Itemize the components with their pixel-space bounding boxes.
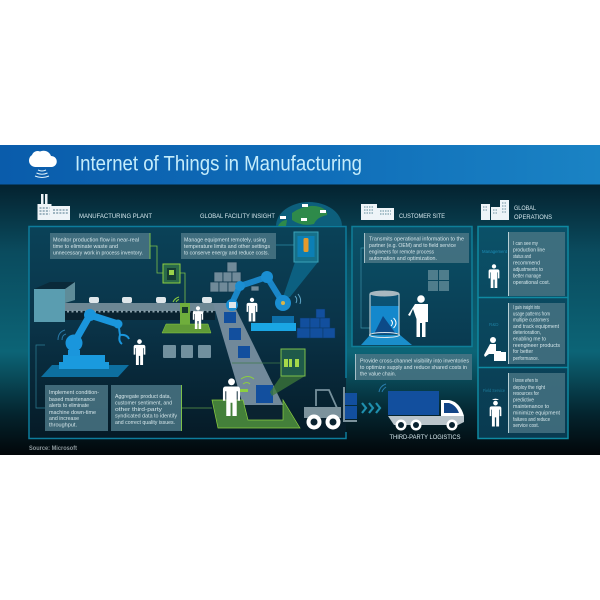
person: left robot operator [134, 339, 145, 365]
card: R&D: reengineer products [513, 343, 560, 349]
factory cube [34, 282, 75, 322]
text block: monitor production: Monitor production flow in near-real [53, 238, 139, 244]
card: R&D [484, 303, 565, 364]
icon: manufacturing plant building [38, 194, 70, 220]
conveyor belt [65, 303, 217, 320]
card: field service: resources for [513, 391, 539, 397]
text block: transmits [364, 233, 469, 263]
text block: condition-based maintenance: based maintenance [49, 397, 95, 403]
card: field service: Field Service [483, 388, 505, 393]
connector line [36, 345, 45, 408]
text block: condition-based maintenance: throughput. [49, 422, 77, 428]
text block: manage equipment: to conserve energy and reduce costs. [184, 250, 269, 256]
text block: condition-based maintenance: alerts to eliminate [49, 403, 89, 409]
text block: aggregate product data: Aggregate product data, [115, 394, 171, 400]
icon: stacked crates [210, 262, 259, 292]
card: R&D: deterioration, [513, 330, 541, 336]
text block: aggregate product data: customer sentiment, and [115, 400, 172, 406]
icon: globe [276, 202, 342, 226]
card: management: operational cost. [513, 280, 550, 286]
title banner [0, 145, 600, 184]
forklift [304, 387, 357, 430]
card: R&D: enabling me to [513, 336, 546, 342]
card: management: adjustments to [513, 267, 543, 273]
text block: condition-based maintenance: machine down-time [49, 410, 96, 416]
left robot arm [41, 309, 129, 377]
right robot platform and arm [226, 271, 301, 331]
heading: global operations: GLOBAL [514, 205, 536, 212]
ramp boxes [224, 312, 273, 403]
icon: monitor projection [283, 232, 318, 297]
card: management: status and [513, 254, 531, 260]
connector lines [150, 246, 185, 303]
text block: aggregate product data: and correct quality issues. [115, 420, 175, 426]
text block: monitor production: time to eliminate waste and [53, 244, 118, 250]
card: field service: service cost. [513, 423, 539, 429]
icon: office towers [481, 200, 509, 220]
card: field service: minimize equipment [513, 410, 560, 416]
packages on conveyor [89, 297, 212, 303]
body background [0, 184, 600, 455]
connector line [361, 248, 370, 328]
card: R&D: and track equipment [513, 324, 559, 330]
text block: aggregate product data [111, 385, 212, 431]
green floor platform [212, 400, 300, 428]
person: customer technician [408, 295, 428, 337]
card: management: Management [482, 249, 508, 254]
card: R&D: usage patterns from [513, 312, 550, 318]
card: R&D: performance. [513, 356, 539, 362]
barcode scan callout [270, 349, 305, 396]
source note: Source: Microsoft [29, 446, 77, 452]
tank [361, 290, 412, 345]
truck [379, 384, 464, 430]
title: Internet of Things in Manufacturing [75, 152, 362, 176]
card: R&D: multiple customers [513, 318, 549, 324]
blue box stack [297, 309, 335, 338]
card: field service: maintenance to [513, 404, 549, 410]
heading: third-party logistics: THIRD-PARTY LOGISTICS [390, 434, 460, 441]
heading: global operations [514, 205, 552, 221]
heading: global operations: OPERATIONS [514, 214, 552, 221]
text block: condition-based maintenance: and increase [49, 416, 79, 422]
text block: cross-channel visibility: the value chain. [360, 372, 396, 378]
heading: global facility insight: GLOBAL FACILITY INSIGHT [200, 213, 275, 220]
text block: cross-channel visibility [355, 354, 472, 380]
card: management: I can see my [513, 241, 538, 247]
person: scanner operator [223, 376, 254, 416]
card: management: recommend [513, 260, 540, 266]
icon: customer site buildings [361, 204, 394, 220]
panel: manufacturing plant [29, 194, 346, 438]
panel: global operations [478, 200, 568, 438]
text block: monitor production [50, 233, 150, 259]
ramp conveyor [213, 303, 283, 420]
text block: transmits: automation and optimization. [369, 256, 437, 262]
card: field service: deploy the right [513, 385, 545, 391]
card: management: production line [513, 248, 545, 254]
icon: cloud with signal [29, 151, 57, 178]
text block: transmits: engineers for remote process [369, 250, 434, 256]
icon: window grid [428, 270, 449, 291]
card: field service: failures and reduce [513, 417, 550, 423]
panel: customer site [352, 204, 472, 346]
text block: manage equipment: temperature limits and other settings [184, 244, 270, 250]
text block: monitor production: unnecessary work in process inventory. [53, 250, 143, 256]
text block: transmits: Transmits operational information to the [369, 236, 464, 242]
card: field service [483, 373, 565, 433]
person: kiosk operator [193, 306, 203, 329]
green kiosk [162, 303, 211, 333]
card: R&D: I gain insight into [513, 305, 540, 311]
text block: condition-based maintenance [45, 385, 108, 431]
heading: customer site: CUSTOMER SITE [399, 213, 445, 220]
card: field service: predictive [513, 398, 534, 404]
arrow: chevrons to truck [362, 403, 380, 413]
card: management: better manage [513, 274, 541, 280]
card: management [482, 232, 565, 296]
text block: aggregate product data: other third-party [115, 407, 162, 413]
text block: manage equipment: Manage equipment remotely, using [184, 238, 266, 244]
text block: condition-based maintenance: Implement condition- [49, 390, 99, 396]
text block: cross-channel visibility: Provide cross-channel visibility into inventories [360, 358, 469, 364]
heading: manufacturing plant: MANUFACTURING PLANT [79, 213, 152, 220]
text block: cross-channel visibility: to optimize supply and reduce shared costs in [360, 365, 467, 371]
icon: green tablet [163, 264, 180, 283]
person: right robot operator [247, 298, 257, 322]
text block: aggregate product data: syndicated data to identify [115, 414, 177, 420]
text block: manage equipment [181, 233, 276, 259]
card: R&D: R&D [489, 322, 499, 327]
card: R&D: for better [513, 349, 533, 355]
storage cans [163, 345, 211, 358]
card: field service: I know when to [513, 378, 538, 384]
text block: transmits: partner (e.g. OEM) and to field service [369, 243, 456, 249]
icon: wifi on conveyor [173, 297, 179, 302]
